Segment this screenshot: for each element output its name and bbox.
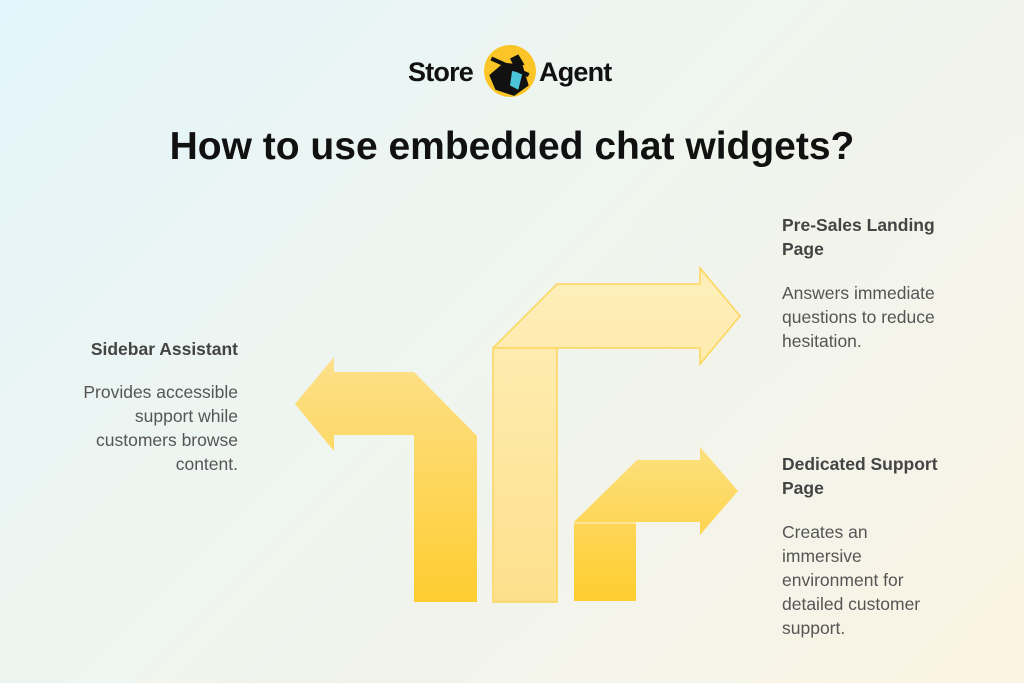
text block: pre-sales: Answers immediate questions to reduce hesitation. xyxy=(782,283,935,351)
text block: sidebar assistant: Sidebar Assistant xyxy=(91,339,238,359)
arrow: dedicated support (lower right) xyxy=(574,447,738,601)
arrow: sidebar (left) xyxy=(295,357,477,602)
text block: sidebar assistant: Provides accessible support while customers browse content. xyxy=(83,382,238,474)
text block: dedicated support: Dedicated Support Page xyxy=(782,454,938,498)
text block: dedicated support xyxy=(782,454,938,638)
logo: Store xyxy=(408,57,473,87)
text block: sidebar assistant xyxy=(83,339,238,474)
logo: Agent xyxy=(539,57,612,87)
arrow: pre-sales (top right) xyxy=(493,268,740,602)
text block: dedicated support: Creates an immersive environment for detailed customer support. xyxy=(782,522,920,638)
title: How to use embedded chat widgets? xyxy=(170,125,854,168)
icon: agent xyxy=(484,45,536,97)
logo xyxy=(408,45,612,97)
text block: pre-sales: Pre-Sales Landing Page xyxy=(782,215,935,259)
text block: pre-sales xyxy=(782,215,935,351)
